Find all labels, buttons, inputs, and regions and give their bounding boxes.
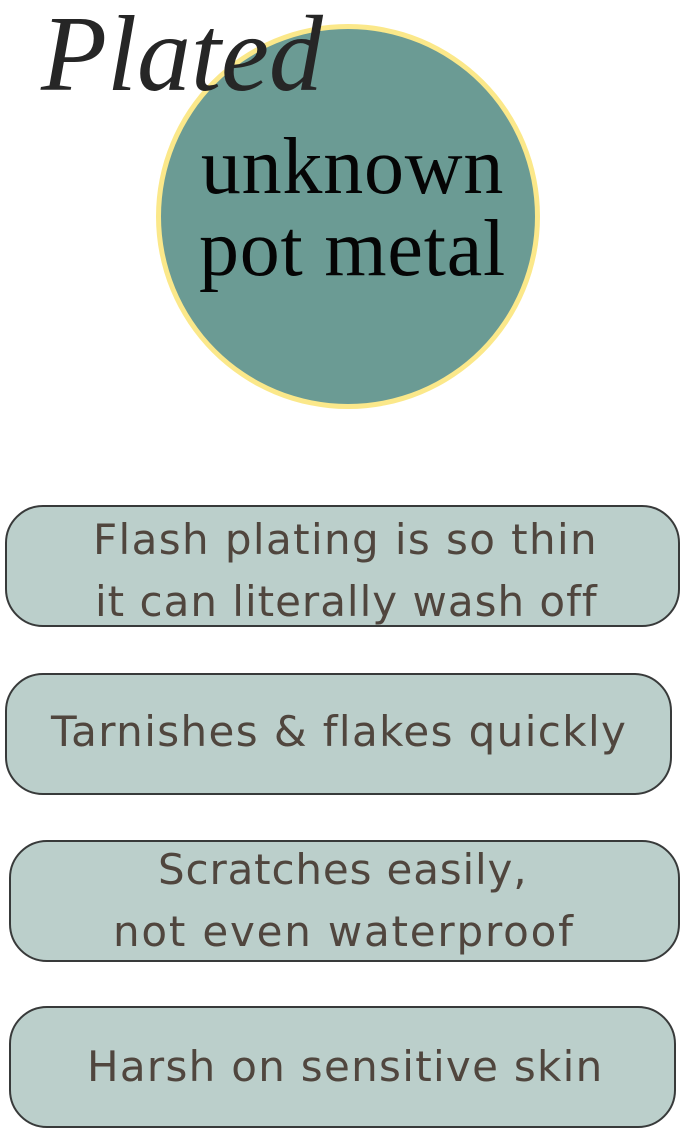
text: Tarnishes & flakes quickly [51,707,627,756]
panel: sensitive skin [9,1006,676,1128]
text: Flash plating is so thin [93,515,598,564]
text: Harsh on sensitive skin [87,1042,604,1091]
text [93,515,598,626]
circle label [199,123,506,293]
text: it can literally wash off [95,577,598,626]
panel: scratches [9,840,680,962]
circle label: pot metal [199,205,506,293]
panel: flash plating [5,505,680,627]
text: not even waterproof [113,907,575,956]
text [113,845,575,956]
circle label: unknown [201,123,504,211]
circle: unknown pot metal [156,24,540,409]
text: Scratches easily, [158,845,527,894]
panel: tarnishes [5,673,672,795]
